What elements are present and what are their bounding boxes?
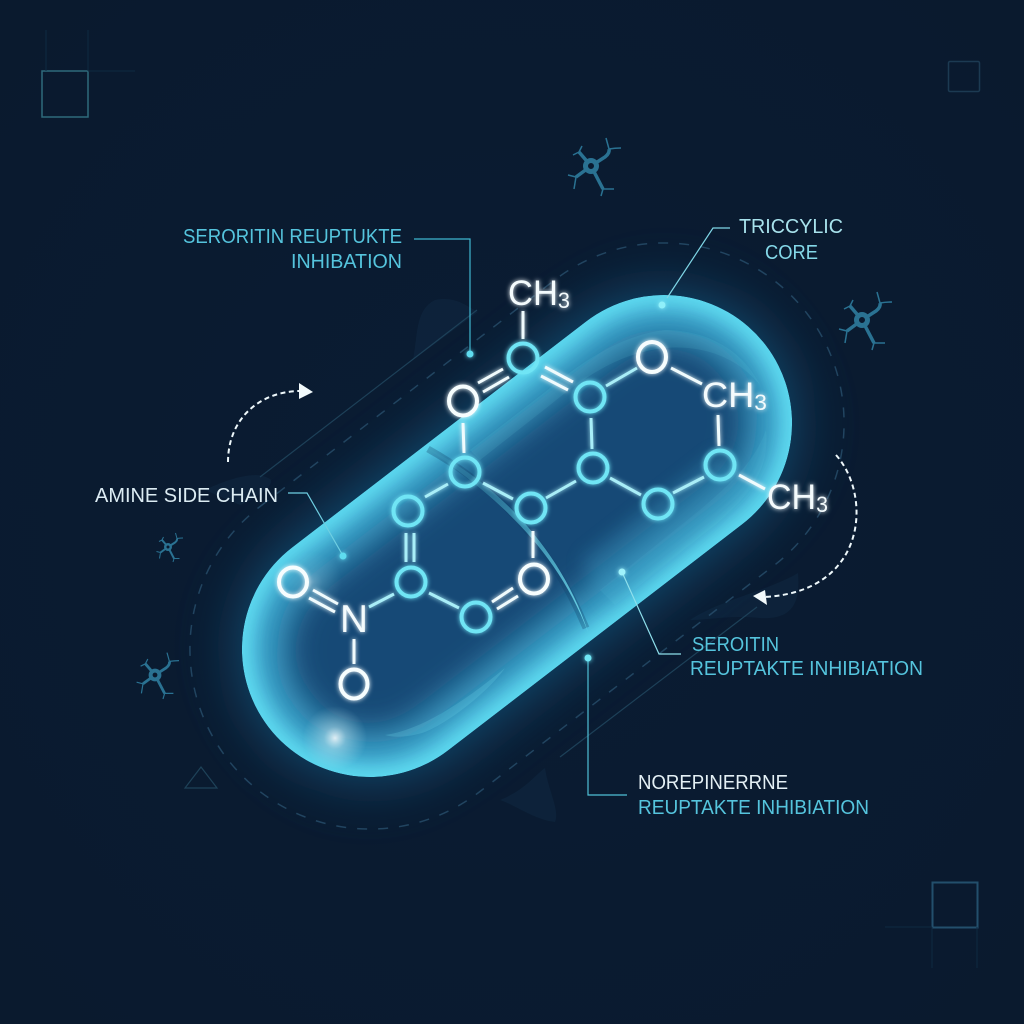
callout: norepinephrine text	[638, 772, 869, 819]
triangle decoration	[185, 767, 217, 788]
atom labels: CH	[767, 478, 818, 517]
molecule structure	[279, 274, 828, 698]
callout: norepinephrine text: NOREPINERRNE	[638, 772, 788, 794]
specular highlight	[306, 708, 364, 766]
capsule mid tone	[247, 300, 787, 772]
soft glow behind oxygen	[292, 561, 334, 604]
neuron icon: top	[568, 138, 621, 196]
arrow: left curved	[228, 383, 313, 462]
atom labels: 3	[816, 492, 828, 517]
capsule body	[242, 295, 792, 777]
atom labels	[340, 274, 828, 641]
lower inner band	[385, 668, 505, 737]
arrow: right curved	[753, 455, 857, 605]
upper inner band	[470, 330, 760, 460]
neuron icon: lower left	[137, 653, 179, 699]
lighter section past seam	[583, 456, 728, 580]
callout: serotonin top leader	[414, 239, 474, 358]
callout: serotonin top text: INHIBATION	[291, 251, 402, 273]
thin outline lines	[260, 310, 757, 757]
capsule bright rim	[242, 295, 792, 777]
dashed orbit outline	[118, 171, 916, 901]
callout: tricyclic text	[739, 216, 843, 264]
white bonds	[309, 311, 765, 664]
corner square: bottom right	[885, 882, 978, 968]
neuron icon: right	[839, 292, 892, 350]
capsule seam	[425, 447, 588, 632]
callout: serotonin right leader	[618, 568, 681, 654]
lower right inner band	[600, 430, 767, 605]
callout: tricyclic text: TRICCYLIC	[739, 216, 843, 238]
capsule dark interior	[265, 318, 769, 754]
white oxygen atoms	[279, 342, 666, 698]
corner square: top left	[42, 30, 135, 117]
atom labels: 3	[558, 288, 570, 313]
callout: tricyclic leader	[658, 228, 730, 308]
callout: amine text: AMINE SIDE CHAIN	[95, 485, 278, 507]
corner square: top right	[948, 62, 980, 92]
atom labels: CH	[508, 274, 559, 313]
callout: amine leader	[288, 493, 346, 560]
callout: serotonin right text	[690, 634, 923, 680]
callout: norepinephrine leader	[584, 654, 627, 795]
atom labels: 3	[754, 390, 767, 415]
callout: norepinephrine text: REUPTAKTE INHIBIATION	[638, 797, 869, 819]
callout: serotonin right text: REUPTAKTE INHIBIATION	[690, 658, 923, 680]
neuron icon: small left	[156, 533, 183, 562]
callout: serotonin top text: SERORITIN REUPTUKTE	[183, 226, 402, 248]
outer capsule glow	[190, 243, 844, 829]
callout: tricyclic text: CORE	[765, 242, 818, 264]
faint background blobs	[205, 299, 798, 822]
atom labels: CH	[702, 376, 753, 415]
cyan atoms	[394, 344, 734, 632]
atom labels: N	[340, 598, 368, 641]
cyan bonds	[369, 368, 704, 608]
callout: serotonin right text: SEROITIN	[692, 634, 779, 656]
callout: serotonin top text	[183, 226, 402, 273]
